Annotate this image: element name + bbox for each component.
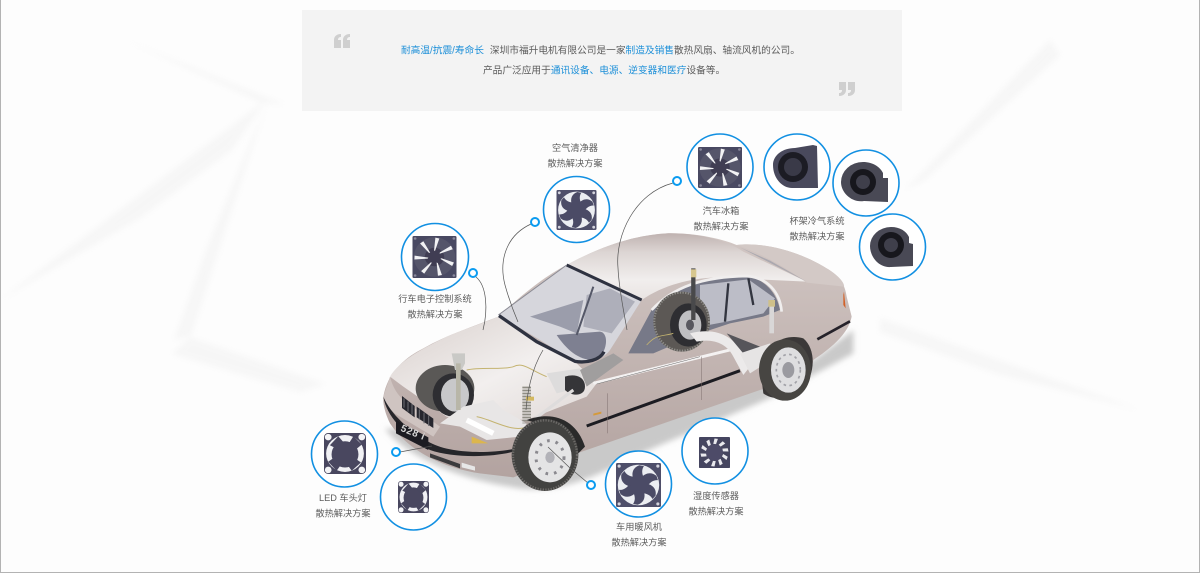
tail light bbox=[843, 292, 846, 308]
label: 散热解决方案 bbox=[547, 158, 603, 168]
label: LED 车头灯 bbox=[319, 493, 367, 503]
side window opening bbox=[628, 277, 780, 353]
label: 散热解决方案 bbox=[693, 220, 749, 232]
door sill highlight bbox=[593, 347, 743, 383]
icon: fan bbox=[698, 147, 742, 188]
intro line one: 耐高温/抗震/寿命长 深圳市福升电机有限公司是一家制造及销售散热风扇、轴流风机的公司。 bbox=[401, 44, 800, 56]
icon: fan bbox=[412, 236, 456, 278]
callout: cup holder cooling bbox=[764, 134, 926, 280]
label: 杯架冷气系统 bbox=[789, 216, 845, 226]
door stripe bbox=[587, 371, 740, 426]
intro line two: 产品广泛应用于通讯设备、电源、逆变器和医疗设备等。 bbox=[483, 64, 725, 76]
label: 湿度传感器 bbox=[693, 491, 739, 501]
front wheel bbox=[512, 416, 585, 491]
front bumper bbox=[383, 397, 513, 456]
icon: fan bbox=[324, 433, 366, 474]
callout: humidity sensor bbox=[682, 418, 748, 516]
number plate: 528 i bbox=[399, 423, 427, 443]
engine parts bbox=[440, 333, 673, 443]
windscreen frame bbox=[567, 265, 642, 300]
car illustration bbox=[383, 233, 853, 491]
car body bbox=[383, 233, 852, 477]
number plate bbox=[396, 420, 428, 450]
leader line: electronic control bbox=[476, 277, 486, 330]
callout: car heater bbox=[606, 451, 672, 548]
icon: fan bbox=[699, 437, 730, 468]
second fan bbox=[380, 464, 446, 530]
blower two bbox=[833, 150, 899, 216]
label: 散热解决方案 bbox=[611, 536, 667, 548]
grille and headlamp front bbox=[383, 377, 440, 437]
label: 汽车冰箱 bbox=[703, 206, 739, 216]
callout: car fridge bbox=[687, 134, 753, 232]
car roof bbox=[567, 233, 807, 300]
car hood bbox=[390, 317, 597, 420]
panel: intro quote bbox=[302, 10, 902, 111]
label: 车用暖风机 bbox=[616, 522, 662, 532]
label: 行车电子控制系统 bbox=[398, 294, 472, 304]
leader line: car fridge bbox=[618, 183, 673, 330]
rear window and boot bbox=[737, 244, 844, 287]
label: 散热解决方案 bbox=[789, 230, 845, 242]
background light streaks bbox=[0, 40, 1140, 410]
connector dots bbox=[392, 177, 681, 489]
label: 空气清净器 bbox=[552, 143, 598, 153]
leader line: LED lamp bbox=[400, 446, 432, 452]
blower three bbox=[860, 214, 926, 280]
label: 散热解决方案 bbox=[688, 506, 744, 516]
callout: LED headlight bbox=[312, 421, 446, 530]
engine bay wheel bbox=[416, 365, 474, 417]
leader line: hood inner bbox=[526, 350, 543, 410]
label: 散热解决方案 bbox=[407, 308, 463, 320]
car ground shadow bbox=[385, 330, 853, 489]
spare wheel in cabin bbox=[653, 292, 710, 352]
label: 散热解决方案 bbox=[315, 508, 371, 518]
callout: electronic control system bbox=[398, 224, 472, 320]
seats bbox=[583, 288, 635, 333]
icon: closing quote bbox=[839, 82, 855, 96]
rear suspension bbox=[690, 268, 777, 375]
icon: fan bbox=[556, 190, 596, 230]
leader line: heater bbox=[548, 447, 588, 483]
rear wheel bbox=[759, 337, 813, 401]
blower one bbox=[764, 134, 830, 200]
callout: air purifier bbox=[544, 142, 610, 242]
icon: fan bbox=[616, 463, 661, 507]
windscreen and cabin bbox=[498, 265, 642, 362]
leader line: air purifier bbox=[503, 224, 531, 322]
icon: opening quote bbox=[334, 34, 350, 48]
